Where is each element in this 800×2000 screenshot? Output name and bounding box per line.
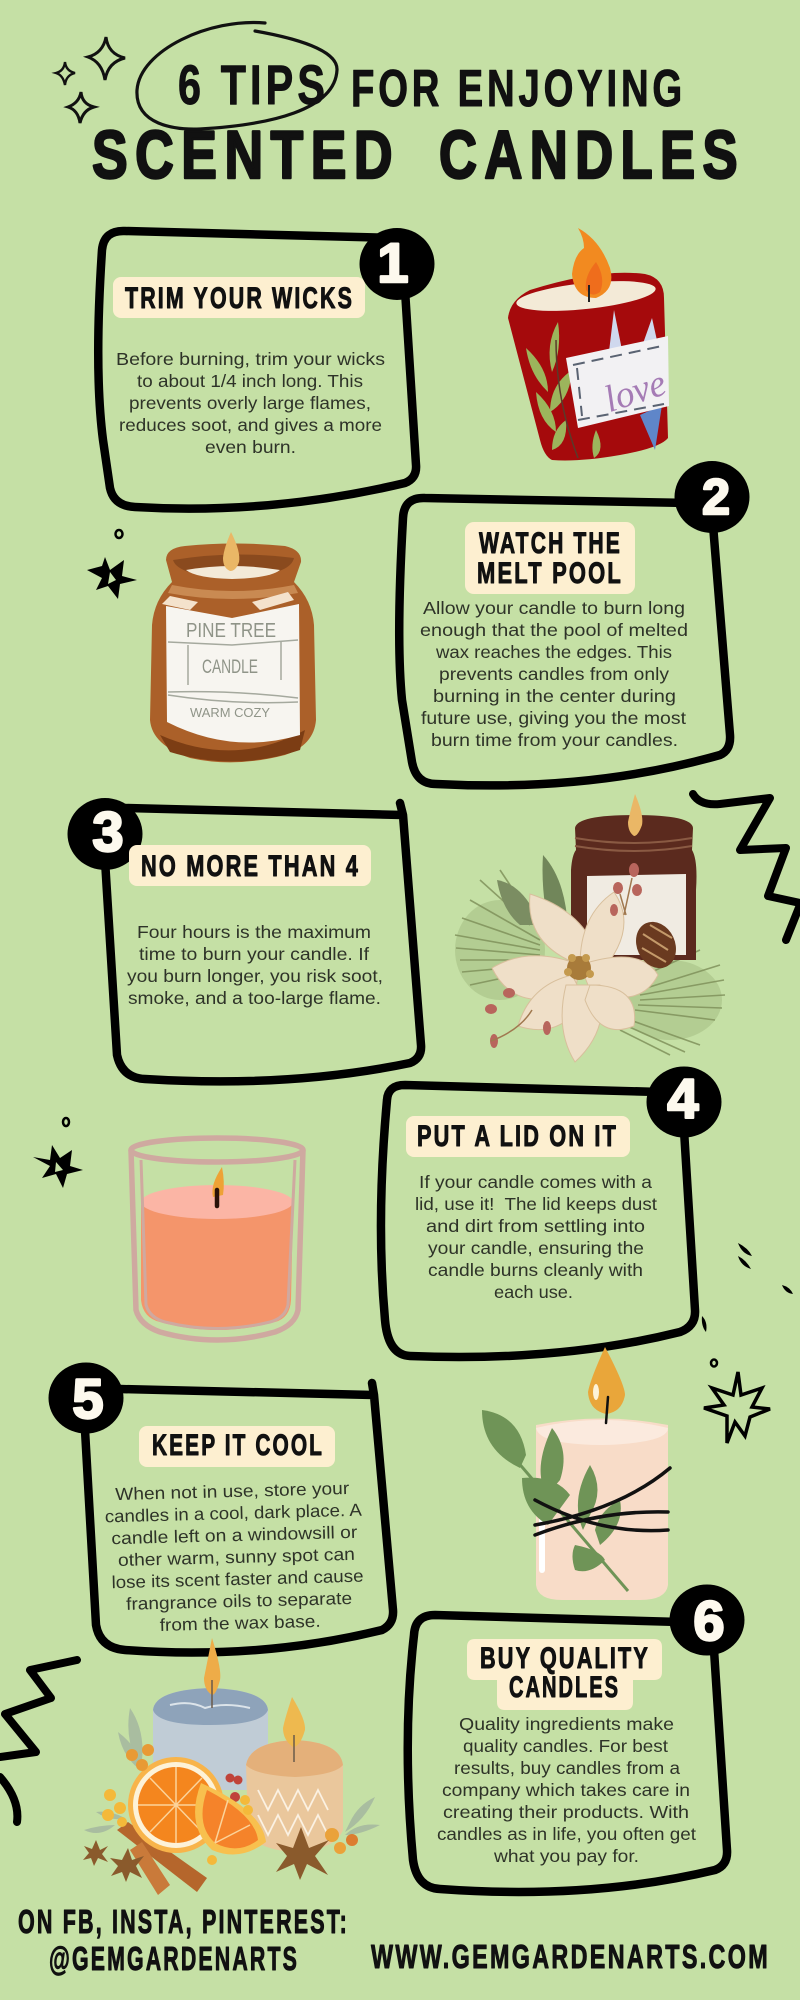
- body text: [415, 1172, 657, 1302]
- heading: [139, 1426, 335, 1467]
- poinsettia petals: [492, 892, 658, 1062]
- body text: future use, giving you the most: [421, 708, 686, 728]
- jar: [571, 815, 696, 960]
- number badge 5: 5: [72, 1367, 104, 1430]
- panel: tip 2: [399, 461, 750, 785]
- heading: WATCH THE: [479, 527, 622, 560]
- love tag: [566, 336, 669, 428]
- heading: CANDLES: [509, 1671, 620, 1704]
- leaves: [482, 1410, 621, 1571]
- pine needles: [455, 870, 725, 1055]
- flame: [628, 794, 642, 836]
- body text: other warm, sunny spot can: [118, 1544, 355, 1570]
- heading: MELT POOL: [477, 557, 623, 590]
- label: [166, 604, 300, 743]
- title: [92, 22, 745, 193]
- title line two: [92, 117, 745, 193]
- icon: peach candle with branch: [482, 1347, 670, 1600]
- body text: burning in the center during: [433, 686, 676, 706]
- panel outline: [399, 498, 730, 785]
- pinecone: [629, 915, 683, 975]
- title line one: 6 TIPS: [178, 53, 329, 116]
- body text: you burn longer, you risk soot,: [127, 966, 383, 986]
- icon: red love candle: love: [599, 362, 671, 421]
- body text: If your candle comes with a: [419, 1172, 652, 1192]
- footer: social handle: @GEMGARDENARTS: [49, 1940, 299, 1977]
- body text: [127, 922, 383, 1008]
- heading: TRIM YOUR WICKS: [125, 282, 354, 315]
- berries: [485, 863, 642, 1048]
- panel outline: [98, 231, 416, 509]
- pine haze: [455, 900, 545, 1000]
- body text: Allow your candle to burn long: [423, 598, 685, 618]
- panel: tip 3: [68, 798, 421, 1081]
- body text: [420, 598, 688, 750]
- panel: tip 6: [408, 1584, 744, 1892]
- branch: [505, 1447, 628, 1591]
- heading: [129, 845, 371, 886]
- body text: from the wax base.: [159, 1611, 321, 1635]
- body text: reduces soot, and gives a more: [119, 415, 382, 435]
- body text: Four hours is the maximum: [137, 922, 371, 942]
- body text: candle left on a windowsill or: [111, 1522, 358, 1548]
- flames: [204, 1638, 220, 1695]
- body text: burn time from your candles.: [431, 730, 678, 750]
- heading: [467, 1639, 662, 1710]
- body text: candles as in life, you often get: [437, 1824, 696, 1844]
- body text: results, buy candles from a: [454, 1758, 680, 1778]
- body text: Quality ingredients make: [459, 1714, 674, 1734]
- icon: zigzag scribble top right: [693, 794, 800, 940]
- cinnamon sticks: [117, 1822, 207, 1892]
- icon: candles with orange and spice: [83, 1638, 380, 1895]
- footer: social handle: ON FB, INSTA, PINTEREST:: [18, 1903, 349, 1940]
- blue candle: [153, 1688, 268, 1790]
- title line one: [178, 53, 686, 118]
- wax body: [536, 1418, 668, 1600]
- icon: outline star doodle: [704, 1360, 770, 1443]
- flame: [572, 228, 611, 298]
- half orange slice: [195, 1783, 266, 1854]
- panel outline: [105, 803, 421, 1081]
- heading: [406, 1116, 630, 1157]
- heading: [465, 522, 635, 594]
- number badge 2: 2: [702, 469, 730, 525]
- panel outline: [381, 1085, 695, 1357]
- heading: KEEP IT COOL: [152, 1429, 324, 1462]
- number badge 6: 6: [693, 1589, 725, 1652]
- body text: time to burn your candle. If: [139, 944, 369, 964]
- body text: to about 1/4 inch long. This: [137, 371, 363, 391]
- body text: [437, 1714, 696, 1866]
- body text: quality candles. For best: [463, 1736, 668, 1756]
- body text: frangrance oils to separate: [126, 1588, 352, 1614]
- leaves: [497, 880, 540, 925]
- body text: even burn.: [205, 437, 296, 457]
- blue streaks: [608, 310, 658, 360]
- icon: coral candle in glass: [131, 1138, 303, 1340]
- body text: and dirt from settling into: [426, 1216, 645, 1236]
- icon: pine tree jar candle: [150, 532, 316, 762]
- panel: tip 1: [98, 228, 434, 509]
- highlights: [168, 585, 298, 599]
- flame: [212, 1167, 224, 1197]
- number badge 5: [48, 1362, 124, 1434]
- footer: social handle: [18, 1903, 349, 1977]
- body text: prevents overly large flames,: [129, 393, 371, 413]
- number badge 1: 1: [377, 231, 409, 294]
- wax: [141, 1205, 293, 1330]
- number badge 3: [68, 798, 142, 870]
- icon: zigzag scribble bottom left: [0, 1660, 77, 1822]
- heading: BUY QUALITY: [480, 1642, 650, 1675]
- body text: lose its scent faster and cause: [111, 1566, 364, 1592]
- body text: your candle, ensuring the: [428, 1238, 644, 1258]
- icon: pine tree jar candle: WARM COZY: [190, 705, 270, 720]
- body text: candle burns cleanly with: [428, 1260, 643, 1280]
- icon: pine tree jar candle: CANDLE: [202, 657, 258, 678]
- title line two: SCENTED: [92, 117, 400, 193]
- title line one: FOR ENJOYING: [351, 60, 686, 118]
- heading: [113, 277, 365, 318]
- number badge 6: [670, 1584, 744, 1656]
- heading: NO MORE THAN 4: [141, 850, 360, 883]
- number badge 2: [674, 461, 750, 533]
- body text: enough that the pool of melted: [420, 620, 688, 640]
- body text: company which takes care in: [442, 1780, 690, 1800]
- icon: candle with poinsettia: [455, 794, 725, 1062]
- body text: creating their products. With: [443, 1802, 689, 1822]
- glass: [131, 1138, 303, 1340]
- yellow berries: [102, 1744, 358, 1865]
- flame: [588, 1347, 625, 1414]
- number badge 4: 4: [667, 1067, 699, 1130]
- icon: red love candle: [508, 228, 671, 460]
- flower centre: [567, 956, 591, 980]
- panel: tip 5: [48, 1362, 393, 1652]
- body text: [116, 349, 385, 457]
- flame: [223, 532, 239, 571]
- body text: smoke, and a too-large flame.: [128, 988, 381, 1008]
- star anise: [83, 1827, 329, 1882]
- panel outline: [408, 1615, 727, 1892]
- panel outline: [85, 1383, 393, 1652]
- icon: star doodle: [33, 1118, 83, 1188]
- body text: each use.: [494, 1282, 573, 1302]
- body text: candles in a cool, dark place. A: [105, 1500, 362, 1526]
- red berries: [226, 1774, 234, 1782]
- twine: [535, 1468, 670, 1535]
- icon: small doodle marks: [702, 1243, 793, 1332]
- body text: When not in use, store your: [115, 1478, 350, 1504]
- body text: [104, 1478, 365, 1636]
- orange slice: [128, 1757, 224, 1853]
- rim opening: [173, 554, 294, 578]
- icon: star doodle: [87, 530, 137, 599]
- body text: what you pay for.: [493, 1846, 639, 1866]
- peach candle: [246, 1740, 343, 1852]
- body text: Before burning, trim your wicks: [116, 349, 385, 369]
- heading: PUT A LID ON IT: [417, 1120, 618, 1153]
- body text: wax reaches the edges. This: [435, 642, 672, 662]
- body text: lid, use it! The lid keeps dust: [415, 1194, 657, 1214]
- number badge 3: 3: [92, 800, 124, 863]
- body text: prevents candles from only: [439, 664, 669, 684]
- sage leaves: [84, 1708, 380, 1835]
- jar glass: [150, 544, 316, 762]
- number badge 4: [646, 1066, 722, 1138]
- number badge 1: [360, 228, 434, 300]
- leaves: [526, 322, 601, 458]
- panel: tip 4: [381, 1066, 722, 1357]
- hand-drawn circle around 6 tips: [137, 22, 337, 129]
- icon: sparkles: [56, 37, 125, 123]
- icon: pine tree jar candle: PINE TREE: [186, 620, 276, 642]
